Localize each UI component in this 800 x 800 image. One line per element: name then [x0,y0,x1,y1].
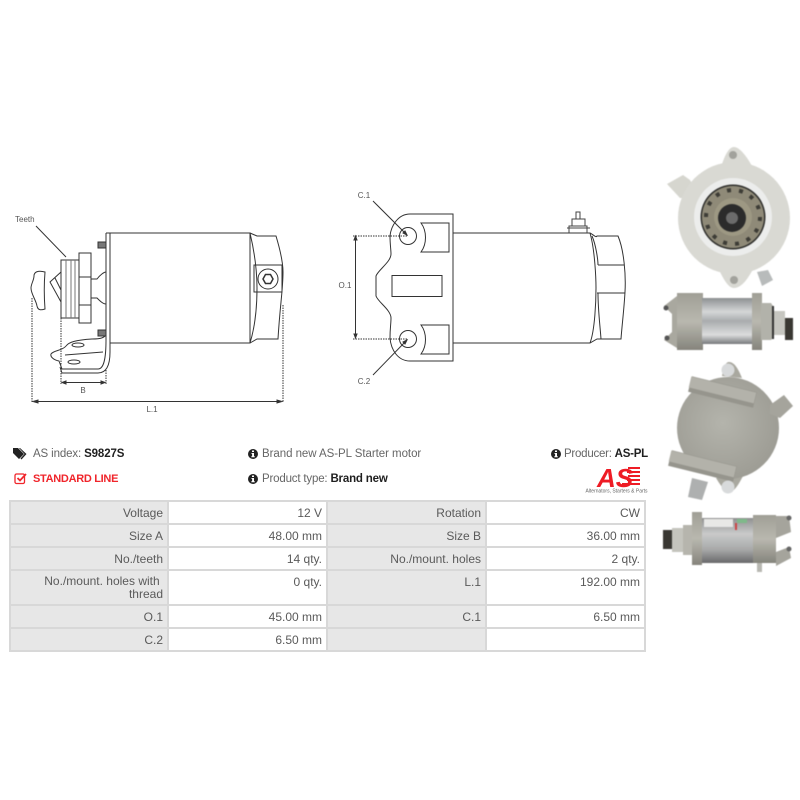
specifications table: Size B [446,529,481,543]
mounting flange [376,214,453,361]
photo: front end with pinion [667,147,790,288]
mounting bracket [51,233,110,373]
specifications table: CW [620,506,640,520]
specifications table: 6.50 mm [593,610,640,624]
specifications table: L.1 [464,575,481,589]
specifications table: Voltage [123,506,163,520]
dimension L.1 [32,298,283,414]
diagram: front mounting view with dimensions [338,191,626,386]
specifications table: O.1 [144,610,163,624]
label: Teeth [15,215,66,257]
photo: side view, pinion right [664,293,793,350]
terminal stud [567,212,590,233]
specifications table: 12 V [297,506,322,520]
logo: AS [586,465,648,494]
specifications table: No./mount. holes with [44,574,160,588]
standard line: STANDARD LINE [33,473,118,485]
specifications table: 14 qty. [287,552,322,566]
diagram: side view with dimensions [15,215,284,414]
specifications table: 45.00 mm [269,610,322,624]
specifications table: No./mount. holes [390,552,481,566]
AS index: AS index: S9827S [33,448,124,460]
product type: Product type: Brand new [262,473,388,485]
label: C.2: C.2 [358,377,371,386]
icon: info type [248,474,258,484]
label: C.1 [358,191,407,235]
specifications table: C.1 [462,610,481,624]
specifications table: C.2 [144,633,163,647]
specifications table [9,500,646,652]
motor body [453,233,625,343]
photos of the starter motor [662,146,794,572]
label: C.1: C.1 [358,191,371,200]
specifications table: 48.00 mm [269,529,322,543]
dimension O.1: O.1 [339,281,352,290]
dimension B [61,318,106,395]
specifications table: 6.50 mm [275,633,322,647]
specifications table: Rotation [436,506,481,520]
specifications table: thread [129,587,163,601]
specifications table: 0 qty. [294,575,322,589]
pinion gear [31,253,106,323]
specifications table: No./teeth [114,552,163,566]
specifications table: 2 qty. [612,552,640,566]
specifications table: 36.00 mm [587,529,640,543]
icon: tags [13,448,26,460]
photo: side view, pinion left [663,512,792,572]
dimension B: B [80,386,86,395]
icon: info brand [248,449,258,459]
icon: red checkbox [14,473,27,484]
dimension O.1 [339,236,407,339]
logo: AS: Alternators, Starters & Parts [586,488,648,494]
producer: Producer: AS-PL [564,448,648,460]
motor body [106,233,283,343]
label: C.2 [358,340,407,386]
specifications table: Size A [129,529,163,543]
product description: Brand new AS-PL Starter motor [262,448,421,460]
photo: rear end cap [670,362,793,500]
dimension L.1: L.1 [146,405,158,414]
icon: info producer [551,449,561,459]
label: Teeth: Teeth [15,215,35,224]
specifications table: 192.00 mm [580,575,640,589]
